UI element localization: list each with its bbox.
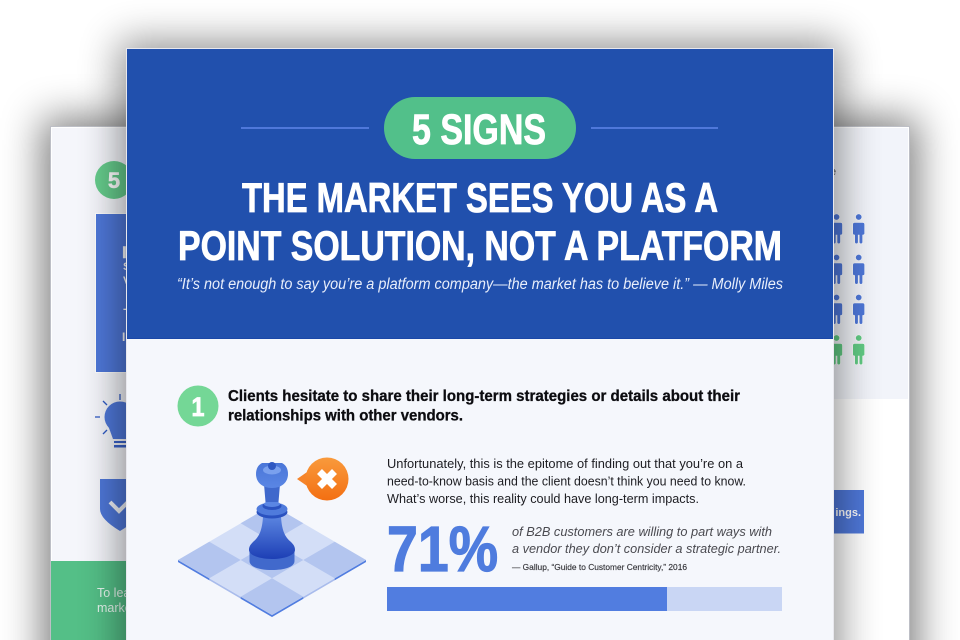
main page shadow — [127, 49, 833, 640]
body copy: Unfortunately, this is the epitome of finding out that you’re on a — [387, 456, 744, 471]
badge: 5 signs — [384, 97, 576, 159]
chess queen — [249, 462, 295, 570]
chessboard — [178, 505, 366, 617]
icon: orange x bubble — [297, 458, 348, 500]
left rule — [241, 127, 369, 129]
blue call to action box: ings. — [835, 507, 861, 519]
statistic description: a vendor they don’t consider a strategic partner. — [512, 541, 781, 556]
statistic description — [512, 524, 781, 572]
blue callout box: S — [123, 261, 130, 273]
title: POINT SOLUTION, NOT A PLATFORM — [178, 222, 782, 269]
statistic: 71 percent: 71% — [387, 513, 498, 585]
right rule — [591, 127, 718, 129]
back page right column — [760, 166, 865, 534]
back page shadow — [50, 126, 910, 640]
body copy: What’s worse, this reality could have long-term impacts. — [387, 491, 699, 506]
sign heading — [228, 388, 740, 424]
green footer band: marke — [97, 601, 132, 615]
people pictogram — [830, 214, 865, 365]
icon: light bulb — [95, 394, 136, 448]
blue call to action box — [760, 490, 864, 534]
sign 1 — [178, 386, 782, 617]
number badge: 1 — [192, 392, 204, 422]
blue callout box: V — [123, 275, 131, 287]
main page — [126, 48, 834, 640]
title — [178, 174, 782, 269]
statistic description: — Gallup, “Guide to Customer Centricity,” 2016 — [512, 562, 687, 572]
blue callout box: - — [123, 303, 127, 315]
progress bar: 71 percent — [387, 587, 782, 611]
header band — [127, 49, 833, 339]
quote: “It’s not enough to say you’re a platform company—the market has to believe it.” — Molly Miles — [177, 276, 783, 293]
blue callout box: I — [122, 243, 127, 262]
sign heading: Clients hesitate to share their long-term strategies or details about their — [228, 388, 740, 405]
sign 5 badge — [95, 161, 133, 199]
statistic description: of B2B customers are willing to part ways with — [512, 524, 772, 539]
blue callout box: I — [122, 330, 125, 344]
text fragment: e — [830, 166, 836, 178]
badge: 5 signs: 5 SIGNS — [412, 106, 546, 154]
sign heading: relationships with other vendors. — [228, 408, 463, 424]
green footer band: To lea — [97, 586, 130, 600]
back page left column — [51, 161, 351, 640]
blue callout box — [96, 214, 156, 372]
body copy: need-to-know basis and the client doesn’t think you need to know. — [387, 474, 746, 488]
back page — [50, 126, 910, 640]
title: THE MARKET SEES YOU AS A — [242, 174, 718, 221]
icon: shield with check — [100, 479, 140, 531]
sign 5 badge: 5 — [108, 168, 120, 193]
green footer band — [51, 561, 351, 640]
body copy — [387, 456, 746, 506]
number badge — [178, 386, 218, 426]
illustration: chess board and piece — [178, 458, 366, 617]
